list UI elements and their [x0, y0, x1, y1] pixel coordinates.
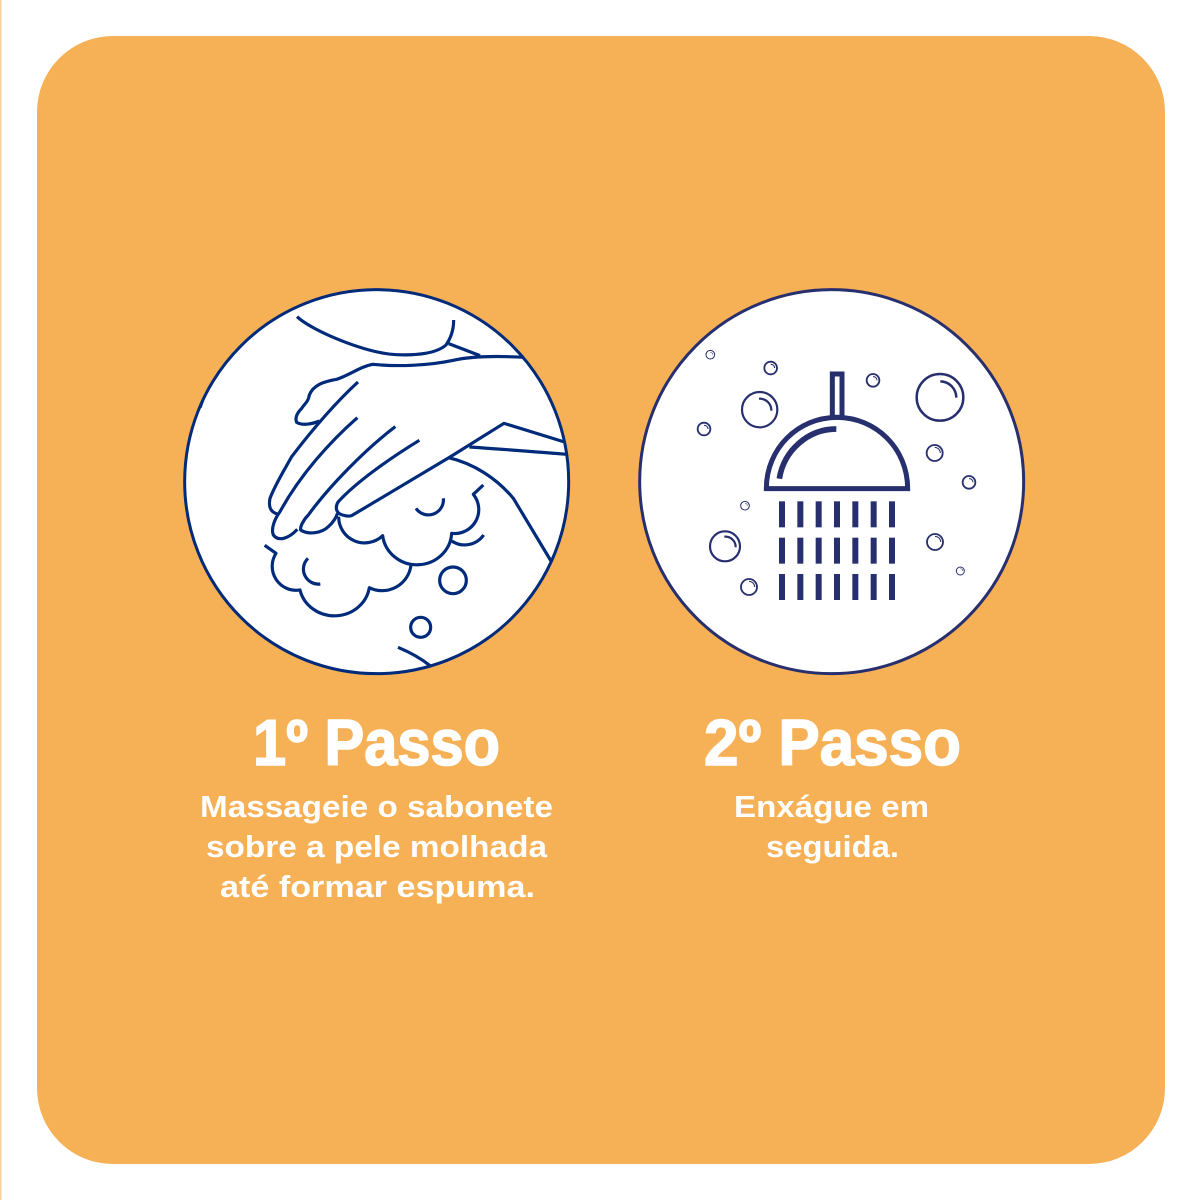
icon: shower pipe	[832, 374, 842, 417]
icon: foam cloud upper	[339, 485, 484, 565]
heading: step 2: 2º Passo	[704, 706, 961, 779]
icon: upper arm and crook	[297, 317, 480, 356]
text block: step 1 description: sobre a pele molhada	[206, 829, 548, 864]
text block: step 2 description: seguida.	[766, 829, 899, 864]
step 2 illustration: shower head and bubbles	[640, 290, 1024, 674]
step 1 illustration: hand washing with foam	[185, 290, 569, 674]
icon: bubbles around shower	[698, 350, 975, 595]
icon: bubbles	[411, 567, 466, 637]
text block: step 1 description: até formar espuma.	[220, 869, 535, 904]
icon: shower head	[766, 417, 908, 489]
text block: step 2 description	[734, 789, 929, 864]
icon: lower skin line	[398, 647, 430, 666]
icon: foam cloud lower	[265, 545, 411, 616]
icon: hand outline	[269, 356, 567, 561]
heading: step 1: 1º Passo	[253, 706, 500, 779]
icon: water jets	[779, 501, 895, 600]
text block: step 1 description: Massageie o sabonete	[200, 789, 553, 824]
text block: step 1 description	[200, 789, 553, 904]
text block: step 2 description: Enxágue em	[734, 789, 929, 824]
